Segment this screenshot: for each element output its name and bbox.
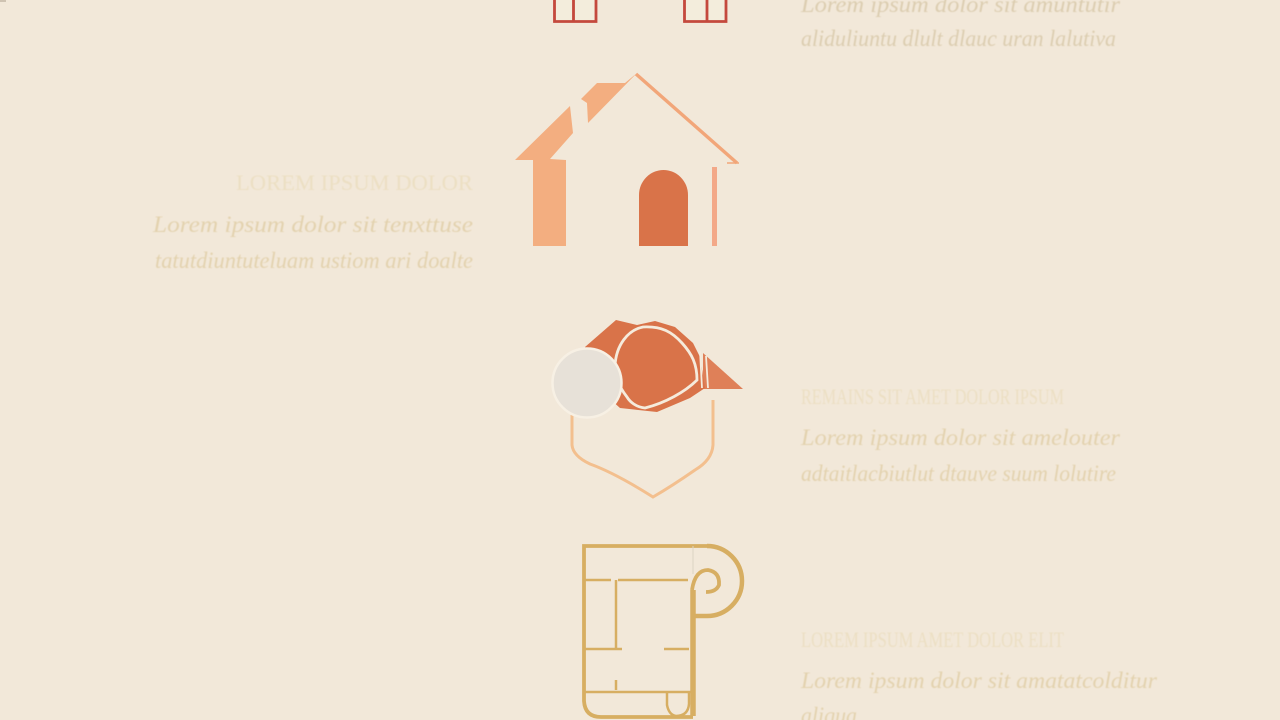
shell body — [585, 320, 705, 412]
shell highlight lines — [615, 327, 697, 408]
roof upper section — [581, 73, 637, 123]
text block: top right — [800, 0, 1121, 51]
right wall — [712, 167, 717, 246]
body text line 2: aliduliuntu dlult dlauc uran lalutiva — [801, 26, 1116, 51]
text block: left — [152, 170, 473, 273]
left window — [554, 0, 596, 22]
shell ridge lines — [700, 351, 708, 388]
horizontal rules — [584, 580, 692, 692]
roof right slope — [636, 74, 737, 163]
inner curl — [692, 570, 719, 592]
shield outline — [572, 400, 713, 497]
heading: REMAINS SIT AMET DOLOR IPSUM — [801, 384, 1064, 409]
right window — [684, 0, 726, 22]
vertical rule — [615, 580, 617, 690]
roof left section — [515, 106, 573, 160]
body text line 1: Lorem ipsum dolor sit amelouter — [800, 425, 1121, 450]
text block: right bottom — [800, 627, 1158, 720]
body text line 2: tatutdiuntuteluam ustiom ari doalte — [155, 248, 473, 273]
cone tip — [703, 353, 743, 389]
top-left corner mark — [0, 0, 6, 2]
body text line 1: Lorem ipsum dolor sit tenxttuse — [152, 212, 473, 237]
scroll right edge — [690, 590, 696, 716]
icon: shell and shield — [552, 320, 743, 497]
icon: house — [515, 73, 739, 246]
thin edge line — [692, 546, 694, 574]
circle — [552, 348, 622, 418]
heading: LOREM IPSUM AMET DOLOR ELIT — [801, 627, 1064, 652]
icon: window pair — [554, 0, 726, 22]
body text line 2: adtaitlacbiutlut dtauve suum lolutire — [801, 461, 1116, 486]
body text line 1: Lorem ipsum dolor sit amatatcolditur — [800, 668, 1158, 693]
icon: scroll — [584, 546, 742, 717]
text block: right middle — [800, 384, 1121, 486]
roof right eave — [727, 162, 739, 164]
heading: LOREM IPSUM DOLOR — [236, 170, 473, 195]
scroll curl — [695, 546, 742, 616]
scroll outline — [584, 546, 707, 717]
door — [639, 170, 688, 246]
lower curl — [667, 693, 689, 716]
left wall — [533, 160, 566, 246]
